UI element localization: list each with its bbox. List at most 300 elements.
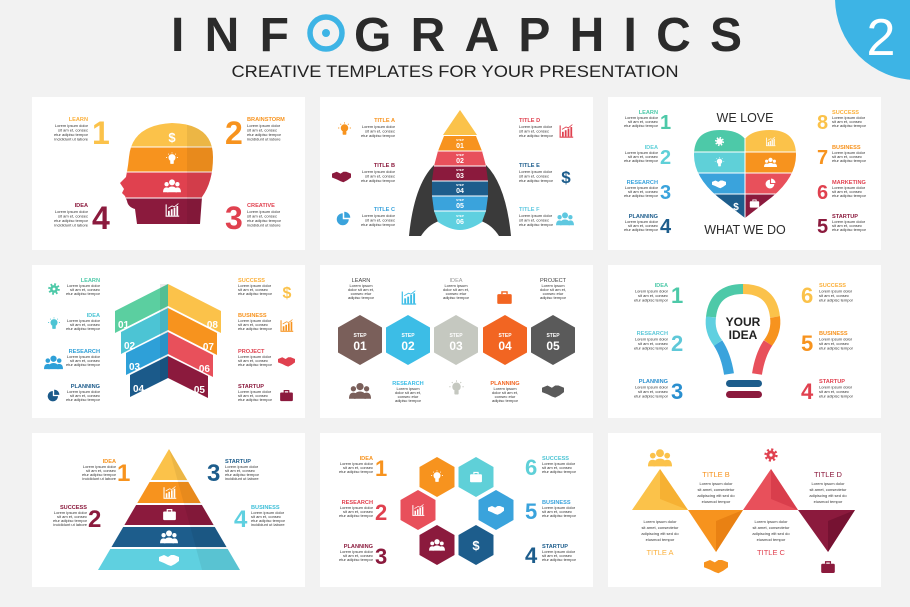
item 3 startup: Lorem ipsum dolor [225, 464, 259, 469]
bottom labels: consec etur [398, 394, 419, 399]
item 4 idea: sit am et, consec [58, 214, 88, 218]
right labels: Lorem ipsum dolor [238, 283, 272, 288]
right labels: $ [283, 285, 292, 302]
right items [817, 110, 867, 238]
title C: Lorem ipsum dolor [754, 519, 788, 524]
right items: Lorem ipsum dolor [542, 461, 576, 466]
title F: sit am et, consec [519, 218, 549, 222]
right items: etur adipisc tempor [832, 158, 867, 163]
badge: 2: 2 [867, 9, 895, 67]
top labels: Lorem ipsum [444, 283, 468, 288]
title D [809, 470, 847, 504]
chevron graphic: 04 [133, 384, 145, 395]
title D: adipiscing elit sed do [809, 493, 847, 498]
right items: Lorem ipsum dolor [832, 185, 866, 190]
left items: 3 [660, 182, 671, 204]
right items: STARTUP [819, 379, 845, 385]
left items: etur adipisc tempor [634, 346, 669, 350]
right labels: PROJECT [238, 349, 265, 355]
title D [519, 118, 573, 138]
title A: sit amet, consectetur [642, 525, 679, 530]
item 2 success: incididunt ut labore [53, 522, 88, 527]
left labels: Lorem ipsum dolor [67, 283, 101, 288]
title [171, 9, 742, 62]
top labels: Lorem ipsum [541, 283, 565, 288]
heart graphic [694, 130, 796, 218]
title A: Lorem ipsum dolor [362, 124, 396, 129]
right labels: Lorem ipsum dolor [238, 318, 272, 323]
rocket fins [409, 165, 511, 236]
right items: sit am et, consec [542, 465, 572, 470]
left items: etur adipisc tempor [624, 227, 659, 232]
left items: sit am et, consec [628, 154, 658, 159]
title: GRAPHICS [354, 9, 742, 62]
item 4 idea: Lorem ipsum dolor [55, 209, 89, 214]
right items: BUSINESS [819, 331, 848, 337]
your idea text: YOUR [726, 315, 761, 329]
title: INF [171, 9, 289, 62]
left items: Lorem ipsum dolor [635, 336, 669, 342]
top labels [348, 278, 567, 300]
hexagon ring: $ [472, 538, 480, 553]
left items [624, 110, 672, 238]
right items: sit am et, consec [542, 509, 572, 514]
icon: target O [310, 17, 342, 49]
right items: 4 [801, 379, 814, 404]
item 2 brainstorm: 2 [225, 115, 243, 151]
right items: Lorem ipsum dolor [542, 505, 576, 510]
left items: 2 [375, 500, 387, 525]
item 2 brainstorm: sit am et, consec [247, 128, 277, 132]
right items: etur adipisc tempor [832, 227, 867, 232]
right items: 5 [801, 331, 813, 356]
left labels: sit am et, consec [70, 358, 100, 363]
title A: TITLE A [646, 548, 674, 557]
bottom labels: adipisc tempor [395, 398, 422, 403]
title F [519, 207, 574, 227]
left items: 2 [671, 331, 683, 356]
bottom labels: RESEARCH [392, 381, 424, 387]
left items: 1 [671, 283, 683, 308]
left items: Lorem ipsum dolor [635, 384, 669, 390]
top labels: consec etur [543, 291, 564, 296]
title F: Lorem ipsum dolor [519, 213, 553, 218]
subtitle: CREATIVE TEMPLATES FOR YOUR PRESENTATION [232, 62, 678, 81]
right labels [238, 278, 295, 402]
chevron graphic: 05 [194, 385, 205, 396]
right items: Lorem ipsum dolor [832, 115, 866, 120]
item 3 startup: etur adipisc tempor [225, 472, 260, 477]
top labels: adipisc tempor [540, 295, 567, 300]
item 2 success [53, 505, 101, 533]
left items: Lorem ipsum dolor [625, 219, 659, 224]
hexagons row: 02 [401, 339, 415, 353]
left items: etur adipisc tempor [634, 394, 669, 398]
panel: pyramid [32, 433, 305, 587]
hexagons row: 03 [449, 339, 463, 353]
rocket body steps: STEP [456, 138, 464, 142]
title D: TITLE D [814, 470, 843, 479]
title C [752, 519, 790, 557]
panel: head: $ [168, 130, 176, 145]
item 4 business [234, 505, 286, 533]
left items: PLANNING [629, 214, 658, 220]
left items: etur adipisc tempor [624, 193, 659, 198]
icons [648, 449, 672, 466]
title C: eiusmod tempor [757, 537, 786, 542]
title A: TITLE A [374, 118, 395, 124]
left items: Lorem ipsum dolor [625, 185, 659, 190]
right labels: SUCCESS [238, 278, 265, 284]
right items: etur adipisc tempor [542, 513, 577, 518]
left labels: LEARN [81, 278, 100, 284]
item 1 learn: sit am et, consec [58, 128, 88, 132]
right items: Lorem ipsum dolor [832, 150, 866, 155]
left items: RESEARCH [342, 500, 373, 506]
title E: Lorem ipsum dolor [519, 169, 553, 174]
right items: sit am et, consec [542, 553, 572, 558]
item 2 success: 2 [88, 506, 101, 533]
panel: light bulb [608, 265, 881, 418]
left items: sit am et, consec [343, 509, 373, 514]
right items: BUSINESS [542, 500, 571, 506]
left items: IDEA [645, 145, 658, 151]
left labels: etur adipisc tempor [66, 291, 101, 296]
title A: adipiscing elit sed do [641, 531, 679, 536]
left labels: Lorem ipsum dolor [67, 389, 101, 394]
rocket body steps: STEP [456, 168, 464, 172]
title C: TITLE C [374, 207, 395, 213]
left items: RESEARCH [627, 180, 658, 186]
right items: etur adipisc tempor [832, 123, 867, 128]
right labels: etur adipisc tempor [238, 326, 273, 331]
title E: sit am et, consec [519, 174, 549, 178]
rocket body steps: 01 [456, 143, 464, 150]
right items: 6 [525, 455, 537, 480]
hexagon ring [400, 457, 514, 565]
item 4 business: 4 [234, 506, 248, 533]
right items: STARTUP [832, 214, 858, 220]
left labels: IDEA [87, 313, 100, 319]
item 1 idea [82, 459, 130, 487]
left items: IDEA [655, 283, 668, 289]
item 1 idea: IDEA [103, 459, 116, 465]
left items: LEARN [639, 110, 658, 116]
left items: PLANNING [639, 379, 668, 385]
left labels: etur adipisc tempor [66, 326, 101, 331]
left items: Lorem ipsum dolor [340, 549, 374, 554]
right labels: Lorem ipsum dolor [238, 389, 272, 394]
title A: etur adipisc tempor [361, 133, 396, 138]
left labels: sit am et, consec [70, 322, 100, 327]
title C: sit am et, consec [365, 218, 395, 222]
left items: RESEARCH [637, 331, 668, 337]
title A [338, 118, 396, 138]
hexagons row: STEP [449, 333, 463, 339]
rocket body steps: 04 [456, 188, 464, 195]
right items: sit am et, consec [832, 119, 862, 124]
left items: etur adipisc tempor [624, 123, 659, 128]
title B: TITLE B [374, 163, 395, 169]
right items: Lorem ipsum dolor [819, 336, 853, 342]
left items: 3 [671, 379, 683, 404]
title D: eiusmod tempor [814, 499, 843, 504]
rocket body steps: STEP [456, 214, 464, 218]
right items: Lorem ipsum dolor [819, 384, 853, 390]
top labels: IDEA [449, 278, 463, 284]
rocket body steps: 06 [456, 219, 464, 226]
bottom labels: adipisc tempor [492, 398, 519, 403]
title B: Lorem ipsum dolor [699, 481, 733, 486]
top labels: adipisc tempor [443, 295, 470, 300]
item 2 brainstorm: Lorem ipsum dolor [247, 123, 281, 128]
left items: 2 [660, 147, 671, 169]
title C: sit amet, consectetur [753, 525, 790, 530]
item 1 learn: LEARN [69, 117, 88, 123]
panel: chevron steps [32, 265, 305, 418]
title A: sit am et, consec [365, 128, 395, 134]
right labels: etur adipisc tempor [238, 291, 273, 296]
item 4 business: etur adipisc tempor [251, 518, 286, 523]
rocket body steps: STEP [456, 198, 464, 202]
item 4 idea: 4 [92, 200, 110, 236]
hexagons row: STEP [401, 333, 415, 339]
right labels: sit am et, consec [238, 322, 268, 327]
title E [519, 163, 571, 187]
left items: Lorem ipsum dolor [340, 461, 374, 466]
left labels: Lorem ipsum dolor [67, 354, 101, 359]
right items: BUSINESS [832, 145, 861, 151]
item 2 brainstorm: BRAINSTORM [247, 117, 285, 123]
chevron graphic: 07 [203, 342, 214, 353]
title C: Lorem ipsum dolor [362, 213, 396, 218]
left items: Lorem ipsum dolor [625, 150, 659, 155]
item 3 startup: STARTUP [225, 459, 251, 465]
chevron graphic [115, 284, 221, 398]
right items: sit am et, consec [819, 389, 849, 394]
top labels: LEARN [352, 278, 370, 284]
left items: 4 [660, 216, 672, 238]
left items: sit am et, consec [628, 119, 658, 124]
top labels: dolor sit am et, [348, 287, 374, 292]
item 3 creative: Lorem ipsum dolor [247, 209, 281, 214]
bottom labels: Lorem ipsum [396, 386, 420, 391]
right labels: Lorem ipsum dolor [238, 354, 272, 359]
right items: etur adipisc tempor [819, 394, 854, 398]
left items [339, 456, 387, 569]
title B: sit amet, consectetur [698, 487, 735, 492]
panel: hexagon ring [320, 433, 593, 587]
left items: 1 [375, 456, 387, 481]
item 2 success: sit am et, consec [57, 514, 87, 519]
panel: hexagon steps [320, 265, 593, 418]
chevron graphic: 03 [129, 362, 141, 373]
chevron graphic: 02 [124, 341, 136, 352]
right items: 4 [525, 543, 538, 568]
title D: sit am et, consec [519, 128, 549, 134]
right items: SUCCESS [542, 456, 569, 462]
panel: head [32, 97, 305, 250]
rocket body steps: STEP [456, 183, 464, 187]
triangles graphic [632, 469, 855, 552]
panel: light bulb: IDEA [729, 328, 758, 342]
pyramid graphic [98, 449, 240, 570]
left items [634, 283, 683, 404]
title C: adipiscing elit sed do [752, 531, 790, 536]
left labels: etur adipisc tempor [66, 397, 101, 402]
top labels: dolor sit am et, [443, 287, 469, 292]
right items [525, 455, 577, 568]
title A: Lorem ipsum dolor [643, 519, 677, 524]
left items: sit am et, consec [343, 465, 373, 470]
right labels: etur adipisc tempor [238, 397, 273, 402]
item 1 idea: Lorem ipsum dolor [83, 464, 117, 469]
right items: etur adipisc tempor [832, 193, 867, 198]
panel: triangles [608, 433, 881, 587]
right items: sit am et, consec [819, 293, 849, 298]
right items: 7 [817, 147, 828, 169]
title C [337, 207, 396, 227]
item 1 learn [54, 115, 110, 151]
title B: TITLE B [702, 470, 730, 479]
left items: sit am et, consec [638, 389, 668, 394]
rocket body steps [432, 136, 488, 230]
left labels: RESEARCH [69, 349, 100, 355]
left items: Lorem ipsum dolor [625, 115, 659, 120]
item 1 learn: 1 [92, 115, 110, 151]
title F: TITLE F [519, 207, 540, 213]
right items: 6 [817, 182, 828, 204]
hexagons row: 01 [353, 339, 367, 353]
item 1 idea: etur adipisc tempor [82, 472, 117, 477]
left items: etur adipisc tempor [624, 158, 659, 163]
right labels: sit am et, consec [238, 287, 268, 292]
top labels: Lorem ipsum [349, 283, 373, 288]
left labels: Lorem ipsum dolor [67, 318, 101, 323]
left items: etur adipisc tempor [339, 557, 374, 562]
item 1 idea: 1 [117, 460, 130, 487]
title D: Lorem ipsum dolor [811, 481, 845, 486]
item 3 startup: incididunt ut labore [225, 476, 259, 481]
top labels: PROJECT [540, 278, 567, 284]
right items: 8 [817, 112, 828, 134]
top labels: consec etur [351, 291, 372, 296]
header [171, 9, 742, 62]
hexagons row: STEP [498, 333, 512, 339]
heading we love: WE LOVE [717, 111, 773, 125]
right items: SUCCESS [832, 110, 859, 116]
title A: eiusmod tempor [646, 537, 675, 542]
left labels: etur adipisc tempor [66, 362, 101, 367]
right items: etur adipisc tempor [819, 298, 854, 302]
left items: PLANNING [344, 544, 373, 550]
top labels: consec etur [446, 291, 467, 296]
title E: TITLE E [519, 163, 540, 169]
item 3 creative: 3 [225, 200, 243, 236]
right items: Lorem ipsum dolor [819, 288, 853, 294]
item 2 success: Lorem ipsum dolor [54, 510, 88, 515]
item 3 creative: etur adipisc tempor [247, 218, 282, 223]
left labels [44, 278, 101, 402]
title D: etur adipisc tempor [519, 133, 554, 138]
right items: Lorem ipsum dolor [542, 549, 576, 554]
right items: SUCCESS [819, 283, 846, 289]
bottom labels: consec etur [495, 394, 516, 399]
item 4 idea: etur adipisc tempor [54, 218, 89, 223]
title E: $ [561, 168, 571, 187]
bottom labels: Lorem ipsum [493, 386, 517, 391]
chevron graphic: 06 [199, 364, 210, 375]
bottom labels [349, 380, 564, 403]
item 3 creative: incididunt ut labore [247, 222, 281, 228]
left items: sit am et, consec [628, 223, 658, 228]
left labels: PLANNING [71, 384, 100, 390]
item 1 learn: Lorem ipsum dolor [55, 123, 89, 128]
item 4 business: sit am et, consec [251, 514, 281, 519]
hexagons row: 05 [546, 339, 560, 353]
right items: sit am et, consec [832, 223, 862, 228]
item 1 idea: sit am et, consec [86, 468, 116, 473]
item 1 idea: incididunt ut labore [82, 476, 117, 481]
left items: Lorem ipsum dolor [340, 505, 374, 510]
item 3 creative [225, 200, 282, 236]
left items: sit am et, consec [343, 553, 373, 558]
right items: Lorem ipsum dolor [832, 219, 866, 224]
rocket body steps: 05 [456, 203, 464, 210]
chevron graphic: 08 [207, 320, 218, 331]
left items: etur adipisc tempor [339, 513, 374, 518]
item 3 startup [207, 459, 260, 487]
item 4 idea [54, 200, 110, 236]
top labels: dolor sit am et, [540, 287, 566, 292]
right labels: BUSINESS [238, 313, 267, 319]
rocket body steps: STEP [456, 153, 464, 157]
right items: 5 [525, 499, 537, 524]
title F: etur adipisc tempor [519, 222, 554, 227]
hexagons row: STEP [353, 333, 367, 339]
bulb graphic [711, 289, 775, 398]
item 4 business: Lorem ipsum dolor [251, 510, 285, 515]
right items: STARTUP [542, 544, 568, 550]
left items: 3 [375, 544, 387, 569]
hexagons row: STEP [546, 333, 560, 339]
item 4 business: incididunt ut labore [251, 522, 285, 527]
left items: etur adipisc tempor [339, 469, 374, 474]
right items [801, 283, 854, 404]
title B: sit am et, consec [365, 174, 395, 178]
item 4 business: BUSINESS [251, 505, 280, 511]
title B: etur adipisc tempor [361, 178, 396, 183]
rocket body steps: 02 [456, 158, 464, 165]
title C: TITLE C [757, 548, 786, 557]
title B [332, 163, 396, 183]
title A [641, 519, 679, 557]
title E: etur adipisc tempor [519, 178, 554, 183]
right items: etur adipisc tempor [542, 469, 577, 474]
right labels: sit am et, consec [238, 393, 268, 398]
right items: etur adipisc tempor [819, 346, 854, 350]
item 2 success: SUCCESS [60, 505, 87, 511]
item 3 startup: 3 [207, 460, 220, 487]
item 2 success: etur adipisc tempor [53, 518, 88, 523]
bottom labels: dolor sit am et, [492, 390, 518, 395]
left items: sit am et, consec [638, 341, 668, 346]
item 1 learn: etur adipisc tempor [54, 132, 89, 137]
left items: sit am et, consec [628, 189, 658, 194]
left items: etur adipisc tempor [634, 298, 669, 302]
bottom labels: PLANNING [490, 381, 520, 387]
item 3 startup: sit am et, consec [225, 468, 255, 473]
